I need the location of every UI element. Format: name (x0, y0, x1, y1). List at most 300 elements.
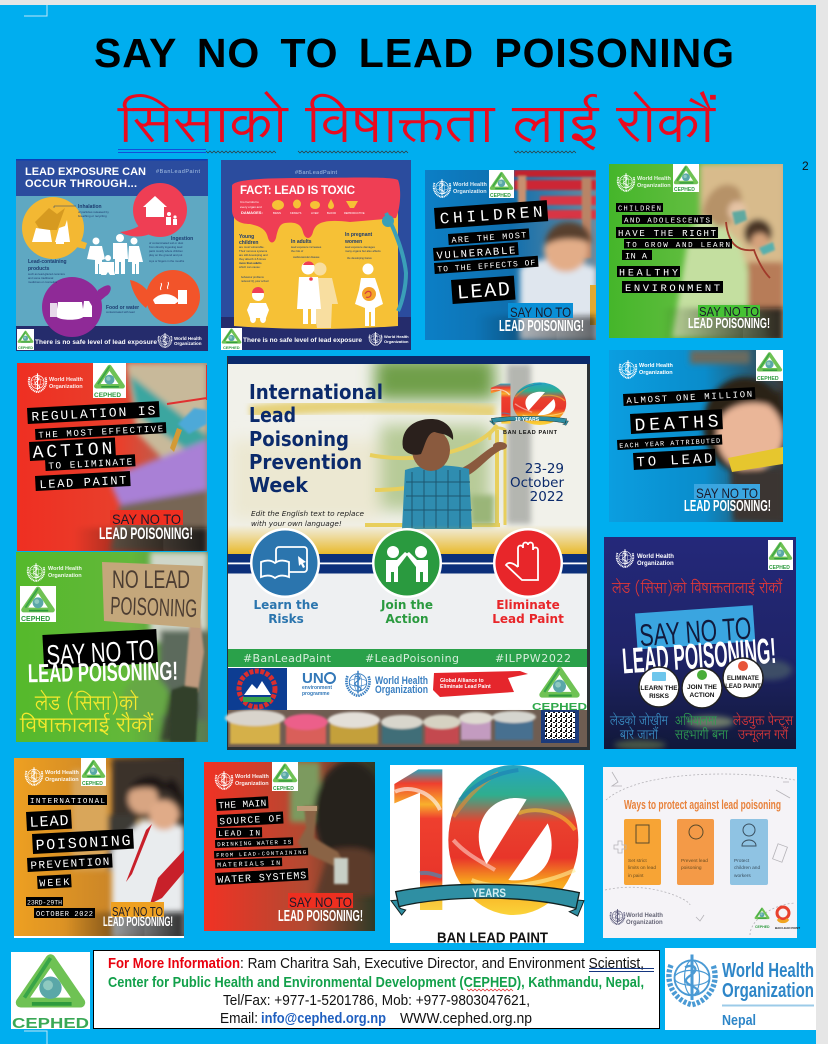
circle: eliminate lead paint (723, 658, 763, 698)
label: lead-containing products (28, 259, 67, 284)
who mark: Organization (49, 384, 83, 390)
text strips: DRINKING WATER IS (217, 839, 292, 848)
say no to badge: LEAD POISONING! (499, 318, 584, 335)
label: food or water: Food or water (106, 305, 139, 311)
organ icons (272, 199, 358, 210)
text strips: ACTION (32, 440, 113, 464)
text strips: TO ELIMINATE (48, 456, 133, 472)
icon: house blob (120, 183, 187, 237)
placard: POISONING (110, 592, 198, 623)
footer strip (243, 332, 409, 345)
footer strip: There is no safe level of lead exposure (243, 337, 362, 344)
card: prevent: poisoning (681, 865, 702, 871)
heading: International (249, 380, 383, 404)
nepali text: लेड (सिसा)को (34, 687, 138, 721)
who mark (216, 771, 269, 789)
figure: adults (297, 261, 338, 328)
column: in pregnant women: In pregnant (345, 232, 373, 238)
contact text: : Ram Charitra Sah, Executive Director, and Environment Scientist, (240, 955, 644, 972)
who mark: World Health (639, 363, 673, 369)
ribbon label: YEARS (472, 886, 506, 900)
10 years ban lead paint logo: 10 YEARS (515, 417, 540, 423)
hashtag band: #LeadPoisoning (365, 652, 459, 665)
hashtag band: #BanLeadPaint (243, 652, 332, 665)
say no to badge: SAY NO TO (638, 610, 753, 653)
teal handle (386, 213, 406, 311)
underlines (467, 968, 654, 991)
nepali actions: लेडयुक्त पेन्ट्स (732, 711, 794, 732)
label: ingestion: toys or fingers in the mouths (149, 259, 185, 263)
text strips: WEEK (39, 878, 70, 890)
column: in adults: the risk of (291, 249, 303, 253)
icon: factory blob (22, 197, 87, 259)
panel: main source of lead (204, 761, 386, 931)
labels: Join the (380, 598, 433, 612)
heading: Prevention (249, 450, 362, 474)
text strips (27, 401, 166, 492)
who mark: Organization (45, 777, 79, 783)
text strips: PREVENTION (30, 857, 110, 873)
card: strict limits: Set strict (628, 858, 647, 864)
say no to badge: SAY NO TO (696, 485, 758, 501)
contact text: For More Information (108, 955, 240, 972)
red paint drip (232, 178, 400, 242)
contact text: Center for Public Health and Environmental Development (CEPHED), Kathmandu, Nepal, (108, 974, 644, 991)
say no to badge: SAY NO TO (699, 304, 759, 319)
nepali actions (609, 711, 794, 746)
who mark: Organization (637, 561, 674, 567)
say no to badge (278, 893, 363, 925)
circle: join the action (682, 668, 722, 708)
organ labels: KIDNEYS (290, 211, 302, 215)
text strips: MATERIALS IN (217, 860, 280, 869)
who mark: World Health (637, 176, 671, 182)
cephed logo (673, 164, 699, 193)
say no to badge: LEAD POISONING! (28, 656, 178, 688)
figure: baby (247, 287, 269, 323)
column: in pregnant women: women (344, 239, 362, 245)
circle: learn the risks (639, 667, 679, 707)
footer strip: Organization (384, 339, 409, 344)
text strips: EACH YEAR ATTRIBUTED (619, 438, 720, 451)
text strips: IN A (625, 252, 648, 262)
footer strip: Organization (174, 341, 202, 346)
logo: global alliance: Global Alliance to (440, 678, 484, 684)
label: lead-containing products: such as lead-glazed ceramics (28, 272, 65, 276)
label: lead-containing products: Lead-containing (28, 259, 67, 265)
icon: food blob (130, 270, 200, 324)
cephed logo (756, 350, 783, 382)
panel: lead exposure can occur through (16, 159, 208, 351)
heading: LEAD EXPOSURE CAN (25, 166, 146, 178)
who mark (28, 563, 82, 581)
logo: global alliance: Eliminate Lead Paint (440, 684, 491, 690)
who mark (29, 373, 83, 392)
edit note (251, 509, 365, 528)
logo: un environment: UN (302, 670, 324, 687)
footer strip: World Health (384, 334, 409, 339)
yellow paint can (234, 200, 398, 329)
cephed logo: CEPHED (18, 346, 33, 350)
cephed logo (755, 908, 770, 929)
page corner mark top (24, 5, 47, 16)
dates (510, 461, 564, 505)
nepali actions: सहभागी बना (674, 725, 729, 746)
card: protect: Protect (734, 858, 750, 864)
who mark (434, 179, 487, 197)
icon: family (87, 234, 143, 275)
column: in pregnant women: the developing foetus (347, 256, 372, 260)
dates: 2022 (530, 489, 564, 505)
labels: Lead Paint (492, 612, 564, 626)
card: strict limits (624, 819, 661, 885)
say no to badge (28, 629, 178, 688)
photo: child drinking from tap (290, 761, 386, 896)
card: protect (730, 819, 768, 885)
page corner mark bottom (24, 1031, 47, 1044)
label: food or water: contaminated with lead (106, 310, 135, 314)
logo band (228, 667, 587, 710)
10 years ban lead paint logo (489, 382, 569, 436)
organ labels: BLOOD (327, 211, 336, 215)
logo: global alliance (433, 671, 528, 697)
text strips: POISONING (35, 833, 131, 855)
who mark: Organization (637, 183, 671, 189)
circle: eliminate lead paint: ELIMINATE (727, 676, 759, 682)
heading: Week (249, 473, 309, 497)
nepali actions: लेडको जोखीम (609, 711, 669, 732)
nepali actions: अभियानमा (675, 711, 718, 732)
text strips: LEAD (456, 279, 511, 306)
labels: Action (385, 612, 429, 626)
title: nepali: सिसाको विषाक्तता लाई रोकौं (117, 86, 717, 169)
text strips: HAVE THE RIGHT (618, 229, 717, 239)
placard: NO LEAD (112, 566, 190, 594)
column: young children: behaviour problems (241, 275, 264, 279)
label: ingestion: of contaminated soil or dust (149, 241, 183, 245)
say no to badge: SAY NO TO (112, 904, 163, 919)
icon: nepal emblem (228, 668, 287, 711)
cephed logo: CEPHED (82, 781, 103, 787)
cephed logo: CEPHED (94, 392, 121, 399)
contact text: WWW.cephed.org.np (400, 1010, 532, 1027)
text strips: CHILDREN (618, 206, 661, 214)
who mark (26, 767, 79, 785)
panel: central poster (225, 356, 590, 750)
text strips: DEATHS (634, 412, 719, 437)
column: young children: more than adults (239, 261, 262, 265)
who mark (618, 173, 671, 191)
photo: protester (122, 552, 208, 742)
text strips: TO LEAD (636, 451, 713, 471)
footer strip (35, 333, 202, 347)
navy band (228, 554, 587, 574)
label: ingestion (149, 236, 193, 263)
cephed logo (272, 762, 298, 792)
photo: child on bars (486, 170, 596, 340)
who mark: Organization (235, 781, 269, 787)
icon: eliminate lead paint (493, 528, 563, 598)
circle: learn the risks: LEARN THE (640, 685, 678, 692)
panel: 10 years ban lead paint (390, 765, 584, 946)
placard (102, 562, 203, 628)
panel: fact lead is toxic (221, 160, 411, 350)
cephed logo: CEPHED (223, 345, 240, 350)
text strips: INTERNATIONAL (30, 798, 105, 806)
text strips: WATER SYSTEMS (217, 871, 307, 887)
text strips (617, 387, 755, 471)
say no to badge (99, 510, 193, 543)
text strips: TO THE EFFECTS OF (437, 259, 536, 275)
cephed logo (20, 586, 56, 623)
logo: world health organization: Organization (375, 684, 428, 696)
nepali actions: बारे जानौं (619, 725, 659, 746)
who mark: World Health (453, 182, 487, 188)
column: young children: reduced IQ, poor school (241, 279, 269, 283)
dates: October (510, 475, 564, 491)
footer: contact box (94, 950, 660, 1028)
text strips (26, 795, 134, 919)
text strips: LEAD PAINT (39, 474, 127, 492)
photo: doctor and child (667, 164, 783, 338)
say no to badge: LEAD POISONING! (684, 498, 771, 515)
10 years ban lead paint logo: BAN LEAD PAINT (503, 430, 558, 436)
text strips: THE MAIN (218, 798, 267, 811)
hashtag: #BanLeadPaint (295, 170, 337, 176)
heading: FACT: LEAD IS TOXIC (240, 185, 355, 197)
label: inhalation: breathing or recycling (78, 214, 107, 218)
text strips: LEAD IN (218, 829, 260, 839)
ban lead paint mini logo (775, 907, 800, 930)
cephed logo (768, 540, 793, 571)
cephed logo: CEPHED (757, 376, 779, 382)
heading: Poisoning (249, 427, 349, 451)
graphic: painted number 10 with ribbon (391, 765, 584, 916)
text strips (433, 200, 548, 306)
cephed logo (81, 758, 106, 787)
photo: paint cans (225, 710, 587, 747)
contact text: Tel/Fax: +977-1-5201786, Mob: +977-9803047621, (223, 992, 530, 1009)
cephed logo: CEPHED (755, 925, 770, 929)
photo: child face (690, 350, 787, 522)
column: young children: children (239, 240, 258, 246)
label: inhalation (54, 204, 109, 218)
circle: learn the risks: RISKS (649, 693, 670, 700)
icon: products blob (42, 277, 111, 337)
nepali actions: उन्मूलन गरौं (737, 725, 789, 746)
nepali text (19, 687, 154, 743)
who mark: Organization (48, 573, 82, 579)
text strips: CHILDREN (439, 203, 543, 229)
edit note: Edit the English text to replace (251, 509, 365, 518)
text strips: HEALTHY (619, 268, 678, 280)
column: young children: which can cause: (239, 265, 261, 269)
cracked ground (614, 660, 792, 750)
text strips: OCTOBER 2022 (36, 911, 93, 919)
say no to badge: SAY NO TO (510, 304, 571, 320)
title: english: SAY NO TO LEAD POISONING (94, 30, 734, 76)
column: in adults: cardiovascular disease (293, 255, 320, 259)
column: in adults: lead exposure increases (291, 245, 322, 249)
edit note: with your own language! (251, 519, 342, 528)
who mark: Organization (626, 920, 663, 926)
damages label: DAMAGES: (241, 210, 263, 215)
organ labels (273, 212, 364, 214)
logo: world health organization (346, 671, 428, 696)
damages label (240, 201, 262, 214)
logo: cephed: CEPHED (532, 702, 587, 713)
text strips: SOURCE OF (219, 813, 282, 827)
panel: regulation (17, 363, 207, 556)
damages label: every organ and (240, 205, 262, 209)
label: lead-containing products: medicines or cosmetics (28, 280, 58, 284)
card: prevent (677, 819, 714, 885)
caption: BAN LEAD PAINT (437, 930, 548, 946)
contact text: info@cephed.org.np (261, 1010, 386, 1027)
column: in adults: In adults (291, 239, 312, 245)
say no to badge: LEAD POISONING! (103, 913, 173, 929)
panel: almost one million deaths (609, 350, 787, 522)
who mark: World Health (637, 554, 674, 560)
circle: join the action: JOIN THE (687, 684, 718, 691)
circle: eliminate lead paint: LEAD PAINT (725, 684, 761, 690)
logo: world health organization: World Health (375, 675, 428, 687)
who mark: Organization (639, 370, 673, 376)
say no to badge: SAY NO TO (289, 894, 352, 910)
cephed logo (221, 328, 242, 350)
text strips: LEAD (29, 813, 69, 832)
panel: international lead poisoning prevention week (14, 758, 184, 940)
contact text (108, 955, 644, 1027)
heading: Lead (249, 403, 296, 427)
who mark (617, 549, 674, 567)
icon: learn the risks (250, 528, 320, 598)
who mark (610, 909, 663, 926)
label: lead-containing products: products (28, 266, 50, 272)
cephed logo: CEPHED (674, 187, 695, 193)
footer: cephed logo: CEPHED (12, 1016, 89, 1032)
label: lead-containing products: and some traditional (28, 276, 54, 280)
text strips: ALMOST ONE MILLION (626, 390, 752, 406)
organ labels: LIVER (311, 211, 319, 215)
page number: 2 (802, 159, 809, 173)
qr code (541, 710, 579, 743)
organ labels: REPRODUCTIVE (344, 211, 365, 215)
column: in pregnant women: lead exposure damages (345, 245, 375, 249)
footer strip: World Health (174, 336, 202, 341)
footer strip: There is no safe level of lead exposure (35, 339, 157, 346)
say no to badge: SAY NO TO (46, 634, 155, 671)
nepali heading: लेड (सिसा)को विषाक्ततालाई रोकौं (611, 577, 783, 601)
labels (254, 598, 564, 626)
card: strict limits: in paint (628, 873, 644, 879)
say no to badge (103, 902, 173, 929)
card: prevent: Prevent lead (681, 858, 708, 864)
panel: ways to protect (603, 767, 800, 938)
contact text: Email: (220, 1010, 258, 1027)
who mark: World Health (49, 377, 83, 383)
footer: cephed logo (11, 952, 90, 1032)
circle: join the action: ACTION (690, 692, 715, 699)
say no to badge (619, 604, 777, 681)
photo: boy on playground (228, 358, 587, 554)
logo: cephed (532, 669, 587, 713)
say no to badge: SAY NO TO (112, 511, 181, 527)
column: in pregnant women (344, 232, 381, 260)
column: in adults (291, 239, 322, 259)
decorative icons (605, 772, 795, 935)
hashtag band: #ILPPW2022 (495, 652, 571, 665)
footer: who nepal logo (665, 948, 816, 1030)
who mark: Organization (453, 189, 487, 195)
say no to badge: LEAD POISONING! (278, 908, 363, 925)
labels: Risks (268, 612, 304, 626)
text strips: FROM LEAD-CONTAINING (216, 849, 306, 859)
label: ingestion: from directly ingesting lead (149, 245, 183, 249)
spellcheck underlines (118, 150, 576, 153)
ban lead paint mini logo: BAN LEAD PAINT (775, 926, 800, 930)
card: strict limits: limits on lead (628, 865, 656, 871)
who mark: World Health (45, 770, 79, 776)
text strips: VULNERABLE (436, 245, 516, 263)
column: young children: are most vulnerable. (239, 245, 265, 249)
photo: schoolgirls (14, 758, 184, 940)
card: protect: workers (734, 873, 751, 879)
who mark (620, 360, 673, 378)
dates: 23-29 (525, 461, 564, 477)
who mark: World Health (626, 913, 663, 919)
column: young children (239, 234, 269, 283)
cephed logo (489, 170, 514, 199)
heading (249, 380, 383, 497)
logo: un environment (302, 670, 335, 697)
labels: Eliminate (496, 598, 560, 612)
column: young children: Young (239, 234, 254, 240)
column: young children: Their nervous systems (239, 249, 268, 253)
label: ingestion: paint mostly where children (149, 249, 183, 253)
heading: OCCUR THROUGH... (25, 178, 137, 190)
cephed logo (93, 363, 126, 399)
column: young children: they absorb 4-5 times (239, 257, 266, 261)
text strips (214, 796, 309, 887)
text strips: 23RD-29TH (27, 900, 62, 906)
label: ingestion: play on the ground and put (149, 253, 183, 257)
text strips (616, 203, 732, 295)
organ labels: BRAIN (273, 211, 281, 215)
column: in pregnant women: many organs but also affects (345, 249, 381, 253)
cephed logo: CEPHED (769, 565, 790, 571)
text strips: TO GROW AND LEARN (626, 242, 730, 250)
hashtag: #BanLeadPaint (156, 169, 200, 175)
nepali text: विषाक्तालाई रौकौं (19, 709, 154, 743)
cephed logo: CEPHED (21, 616, 50, 623)
cephed logo: CEPHED (273, 786, 294, 792)
column: young children: are still developing and (239, 253, 268, 257)
photo: painting (17, 363, 207, 556)
panel: nepali say no (604, 537, 796, 750)
grey lower section (228, 573, 587, 649)
panel: no lead poisoning protest (16, 552, 208, 743)
say no to badge (688, 304, 770, 332)
damages label: It is harmful to (240, 200, 259, 204)
cephed logo (17, 329, 34, 350)
say no to badge (684, 484, 771, 515)
text strips: ARE THE MOST (451, 231, 527, 246)
text strips: AND ADOLESCENTS (624, 218, 710, 226)
who mark: World Health (48, 566, 82, 572)
figure: pregnant woman (355, 264, 383, 326)
panel: children are the most vulnerable (425, 170, 596, 346)
